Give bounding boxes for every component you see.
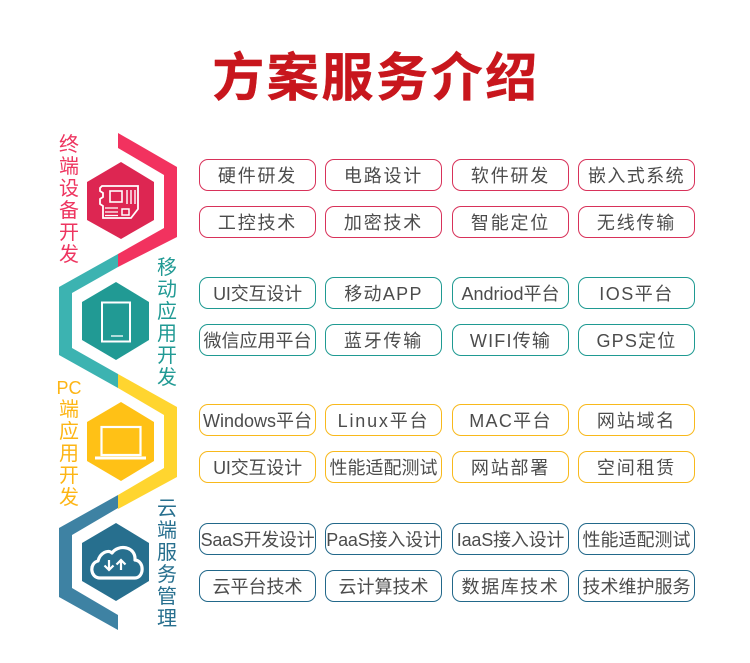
side label: PC apps [56, 378, 82, 509]
icon: laptop [87, 402, 154, 481]
panel: terminal device services: 工控技术 [218, 213, 297, 233]
side label: cloud: 服 [157, 542, 177, 564]
side label: mobile apps: 用 [157, 323, 177, 345]
side label: mobile apps: 动 [157, 279, 177, 301]
panel: PC app services: Windows平台 [203, 411, 312, 431]
side label: terminal devices: 开 [59, 222, 79, 244]
panel: PC app services: 空间租赁 [597, 458, 676, 478]
icon: circuit board [87, 162, 154, 239]
side label: PC apps: 用 [59, 443, 79, 465]
title: 方案服务介绍 [212, 50, 540, 108]
side label: terminal devices: 端 [59, 156, 79, 178]
panel: PC app services: 性能适配测试 [330, 458, 438, 478]
side label: cloud: 云 [157, 498, 177, 520]
ribbon: PC apps [118, 374, 177, 509]
panel: mobile app services: 微信应用平台 [204, 331, 312, 351]
side label: cloud: 端 [157, 520, 177, 542]
icon: tablet [82, 282, 149, 360]
side label: PC apps: 发 [59, 487, 79, 509]
side label: cloud: 务 [157, 564, 177, 586]
side label: terminal devices: 设 [59, 178, 79, 200]
panel: mobile app services: Andriod平台 [461, 284, 560, 304]
panel: cloud services: SaaS开发设计 [201, 530, 314, 550]
panel: PC app services: Linux平台 [338, 411, 429, 431]
side label: terminal devices [59, 134, 79, 266]
panel: mobile app services: UI交互设计 [213, 284, 302, 304]
side label: PC apps: 应 [59, 421, 79, 443]
panel: terminal device services: 无线传输 [597, 213, 676, 233]
panel: mobile app services: 蓝牙传输 [344, 331, 423, 351]
side label: terminal devices: 备 [59, 200, 79, 222]
ribbon: terminal devices [118, 133, 177, 267]
panel: mobile app services: GPS定位 [596, 331, 676, 351]
panel: mobile app services: 移动APP [344, 284, 423, 304]
ribbon: mobile apps [59, 254, 118, 388]
side label: mobile apps: 发 [157, 367, 177, 389]
side label: mobile apps: 应 [157, 301, 177, 323]
panel: terminal device services: 加密技术 [344, 213, 423, 233]
panel: PC app services: MAC平台 [469, 411, 552, 431]
panel: cloud services: 数据库技术 [462, 577, 560, 597]
panel: terminal device services: 软件研发 [471, 166, 550, 186]
side label: terminal devices: 发 [59, 244, 79, 266]
side label: mobile apps [157, 257, 177, 389]
panel: mobile app services [199, 277, 695, 356]
panel: cloud services: 云计算技术 [338, 577, 428, 597]
panel: mobile app services: WIFI传输 [470, 331, 551, 351]
panel: PC app services: 网站部署 [471, 458, 550, 478]
panel: mobile app services: IOS平台 [599, 284, 674, 304]
panel: cloud services: IaaS接入设计 [457, 530, 564, 550]
side label: PC apps: PC [56, 378, 82, 398]
side label: cloud: 理 [157, 608, 177, 630]
panel: cloud services: 性能适配测试 [582, 530, 690, 550]
panel: cloud services [199, 523, 695, 602]
side label: PC apps: 端 [59, 399, 79, 421]
panel: PC app services: 网站域名 [597, 411, 676, 431]
panel: terminal device services [199, 159, 695, 238]
panel: terminal device services: 硬件研发 [218, 166, 297, 186]
panel: cloud services: 云平台技术 [212, 577, 302, 597]
panel: terminal device services: 嵌入式系统 [588, 166, 685, 186]
side label: PC apps: 开 [59, 465, 79, 487]
side label: mobile apps: 移 [157, 257, 177, 279]
panel: PC app services [199, 404, 695, 483]
icon: cloud [82, 523, 149, 601]
panel: terminal device services: 电路设计 [344, 166, 423, 186]
side label: cloud: 管 [157, 586, 177, 608]
side label: terminal devices: 终 [59, 134, 79, 156]
panel: PC app services: UI交互设计 [213, 458, 302, 478]
panel: cloud services: 技术维护服务 [582, 577, 690, 597]
side label: mobile apps: 开 [157, 345, 177, 367]
side label: cloud [157, 498, 177, 630]
ribbon: cloud [59, 495, 118, 630]
panel: terminal device services: 智能定位 [471, 213, 550, 233]
panel: cloud services: PaaS接入设计 [326, 530, 441, 550]
